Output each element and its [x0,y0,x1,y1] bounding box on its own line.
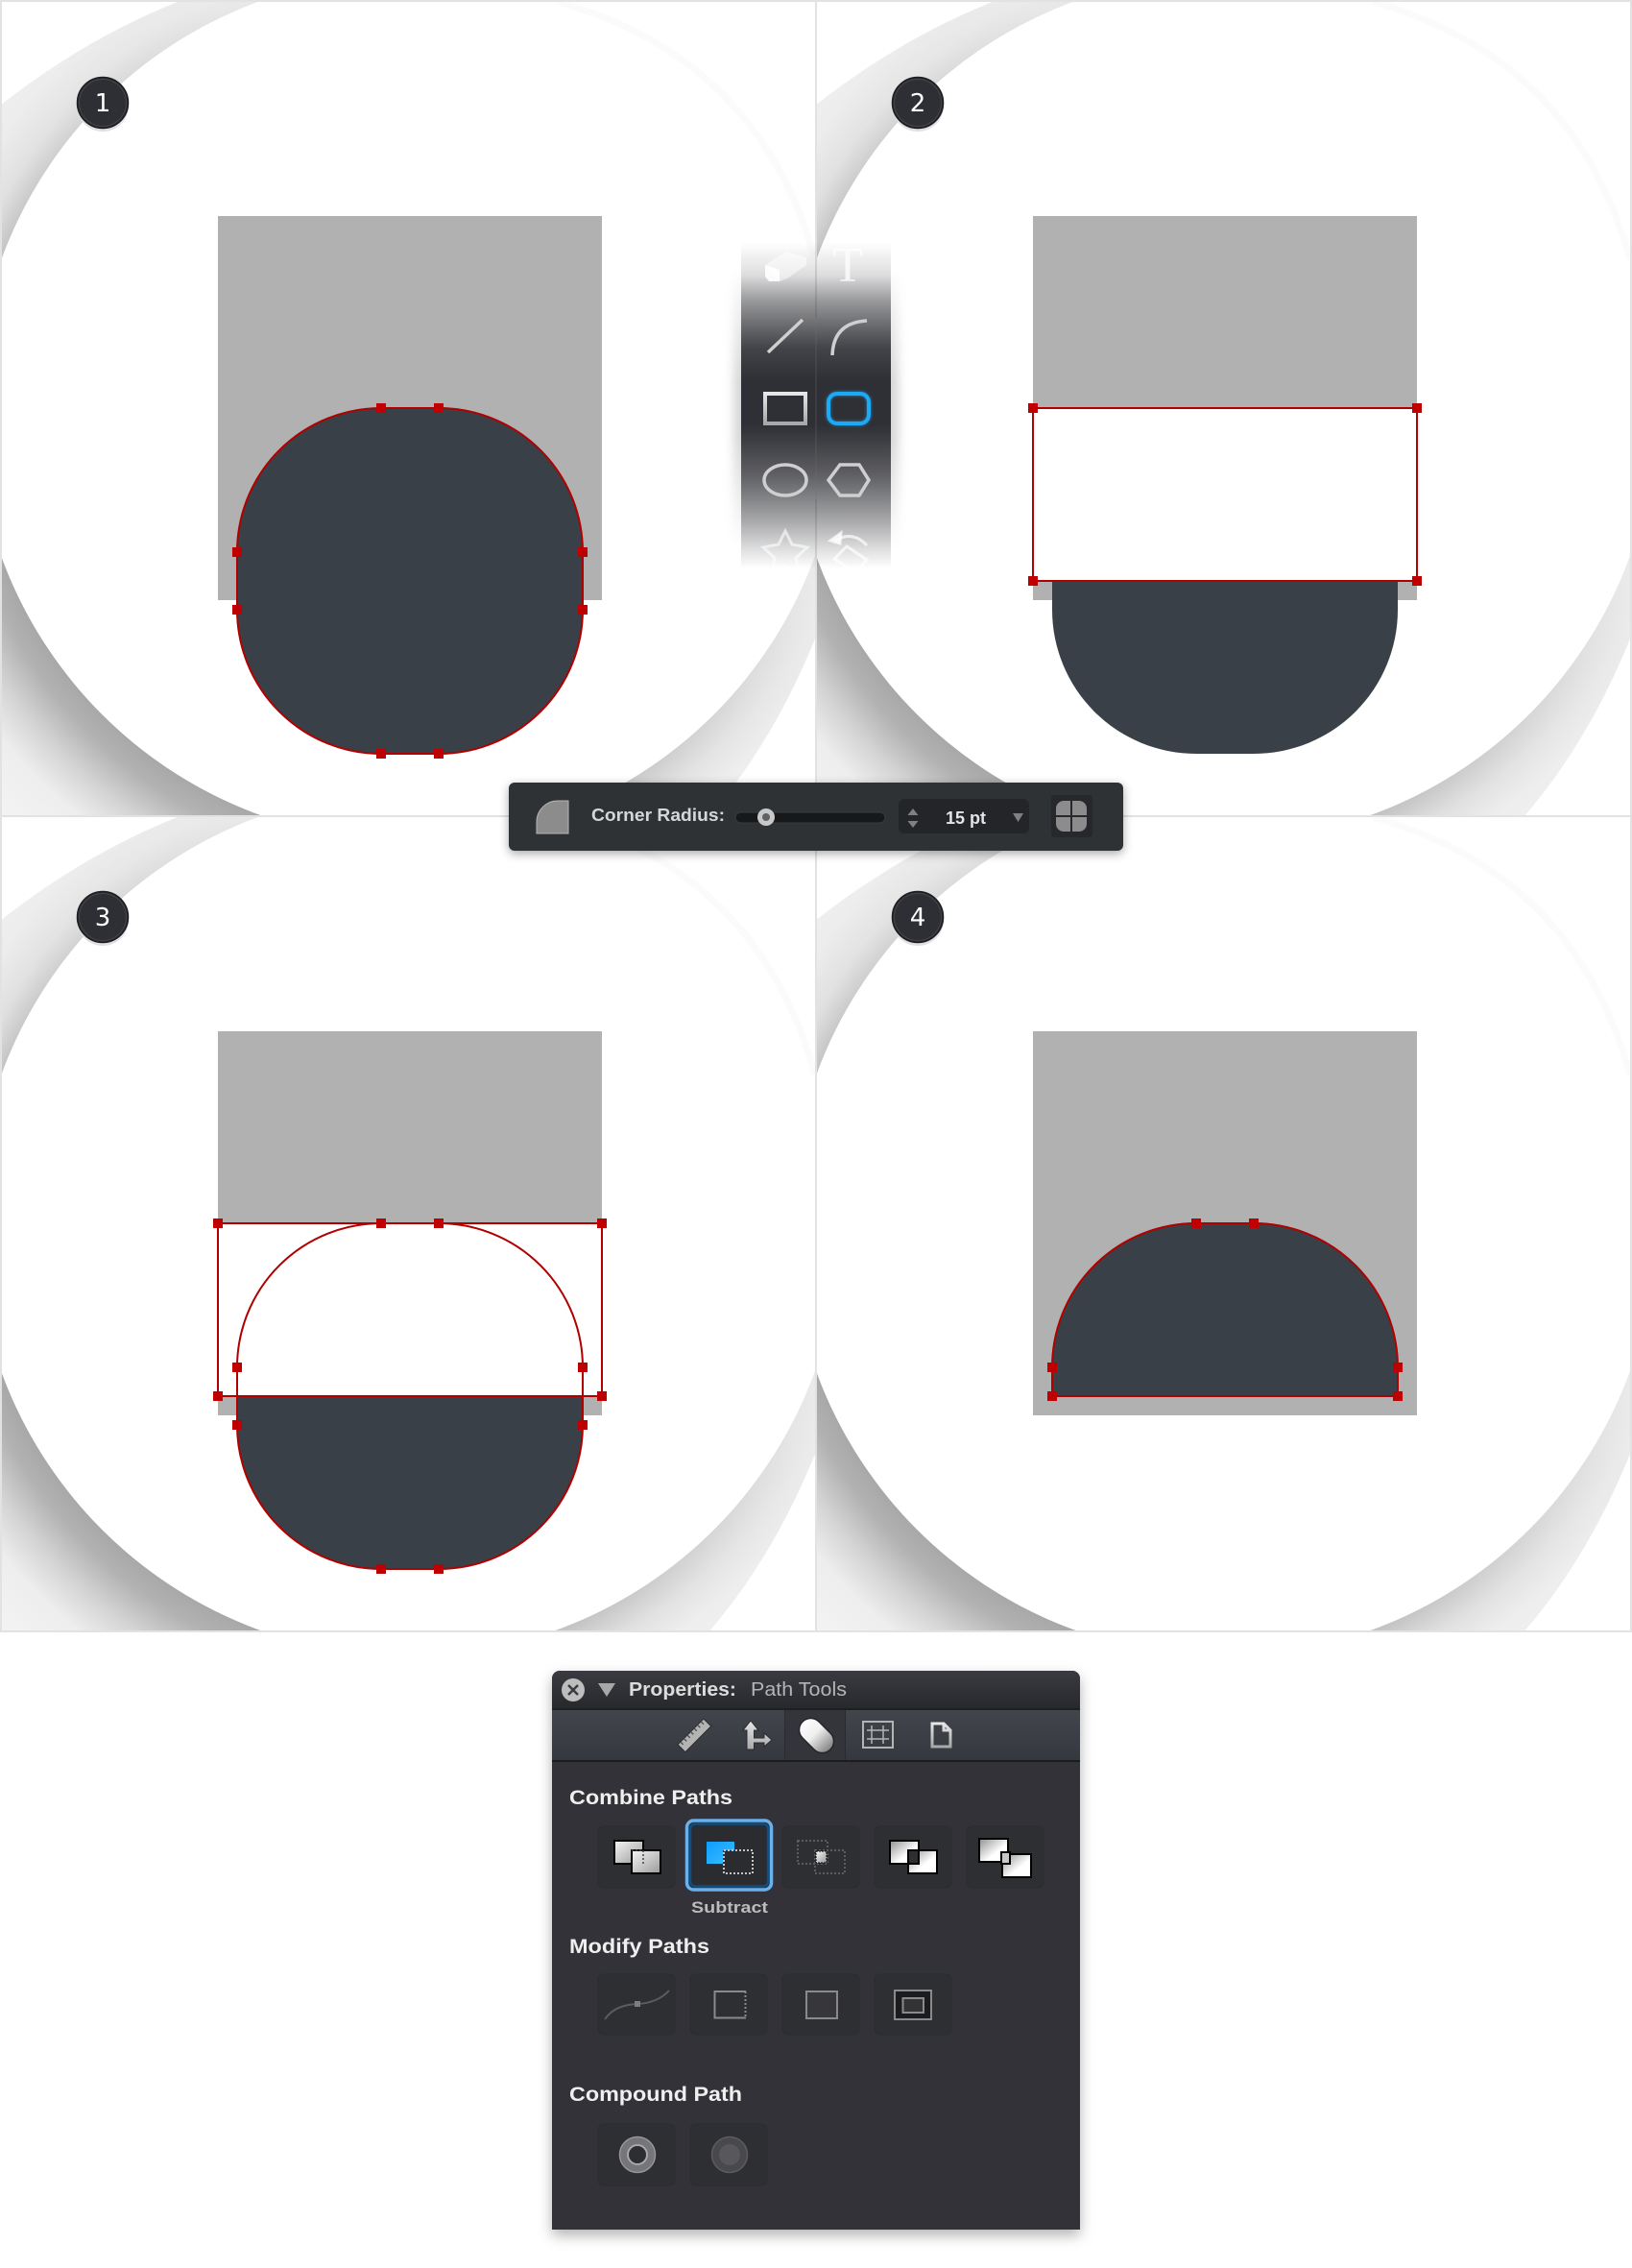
panel body [552,1671,1080,2230]
panel 4 grey square [1033,1031,1417,1415]
icon: ruler [678,1719,711,1752]
icon: rounded rectangle tool selected [828,394,869,423]
step badge 1: 1 [95,89,110,118]
icon: document [932,1724,950,1747]
icon: grid [863,1722,893,1748]
step badge 4 [892,891,944,946]
step badge 3 [77,891,129,946]
corner mode button [1051,795,1092,837]
icon: overlapping circles [799,1718,834,1753]
panel 3 background circle and shadow [0,790,841,1656]
panel 1 anchor handles [232,403,588,759]
step badge 2: 2 [910,89,925,118]
properties panel: path tools [552,1671,1080,2230]
panel header bar: Properties: [629,1679,736,1701]
button: closed path [782,1974,859,2035]
panel 3 white rectangle with red outline [218,1223,602,1396]
panel header bar: Path Tools [751,1679,847,1701]
panel 4 anchor handles [1047,1218,1403,1401]
panel 2: white rectangle over shapes [790,0,1632,841]
panel 3: both shapes selected [0,790,841,1656]
step badge 4: 4 [910,904,925,932]
panel 2 corner handles [1028,403,1422,586]
heading: compound path: Compound Path [569,2083,742,2106]
step badge 2 [892,77,944,132]
button: make compound [598,2124,675,2185]
button: curve [598,1974,675,2035]
panel 3 grey square [218,1031,602,1415]
icon: arc tool [832,321,867,355]
panel 4: subtracted dome result [790,790,1632,1656]
panel 1 dark rounded rectangle [237,408,583,754]
step badge 1 [77,77,129,132]
button: divide [967,1826,1044,1888]
heading: combine paths: Combine Paths [569,1786,732,1809]
label: subtract: Subtract [691,1898,768,1917]
icon: rotate tool [830,533,867,572]
panel 2 background circle and shadow [790,0,1632,841]
button: subtract selected [687,1821,772,1890]
icon: ellipse tool [764,465,806,495]
icon: eraser [765,252,806,281]
value stepper 15 pt [899,799,1029,833]
panel 3 dark rounded rectangle remainder [238,1397,582,1568]
slider [735,808,885,826]
panel header bar [552,1671,1080,1710]
icon: star tool [763,531,807,572]
label: corner radius: Corner Radius: [591,806,725,825]
button: intersect [782,1826,859,1888]
panel 1 background circle and shadow [0,0,841,841]
icon: arrows [743,1721,772,1749]
icon: text tool: T [832,238,863,293]
tab row [552,1710,1080,1762]
icon: line tool [768,320,803,352]
icon: corner shape [537,801,568,833]
icon: rectangle tool [765,394,805,423]
heading: modify paths: Modify Paths [569,1935,709,1958]
panel 4 dark dome shape [1052,1223,1398,1396]
panel 3 rounded rectangle outline [237,1223,583,1569]
panel 1: rounded rectangle over grey square [0,0,841,841]
corner radius toolbar [509,783,1123,851]
panel 2 grey square [1033,216,1417,600]
panel 4 background circle and shadow [790,790,1632,1656]
panel 2 white rectangle with red outline [1033,408,1417,581]
panel 2 dark rounded rectangle remainder [1052,582,1398,754]
panel 1 grey square [218,216,602,600]
value stepper 15 pt: 15 pt [946,808,986,828]
step badge 3: 3 [95,904,110,932]
tool palette: vertical fading shape tools [733,238,899,572]
panel 3 anchor handles [213,1218,607,1574]
button: add [598,1826,675,1888]
button: exclude [875,1826,951,1888]
button: release compound [690,2124,767,2185]
button: offset path [875,1974,951,2035]
button: open path [690,1974,767,2035]
icon: polygon tool [828,465,869,495]
